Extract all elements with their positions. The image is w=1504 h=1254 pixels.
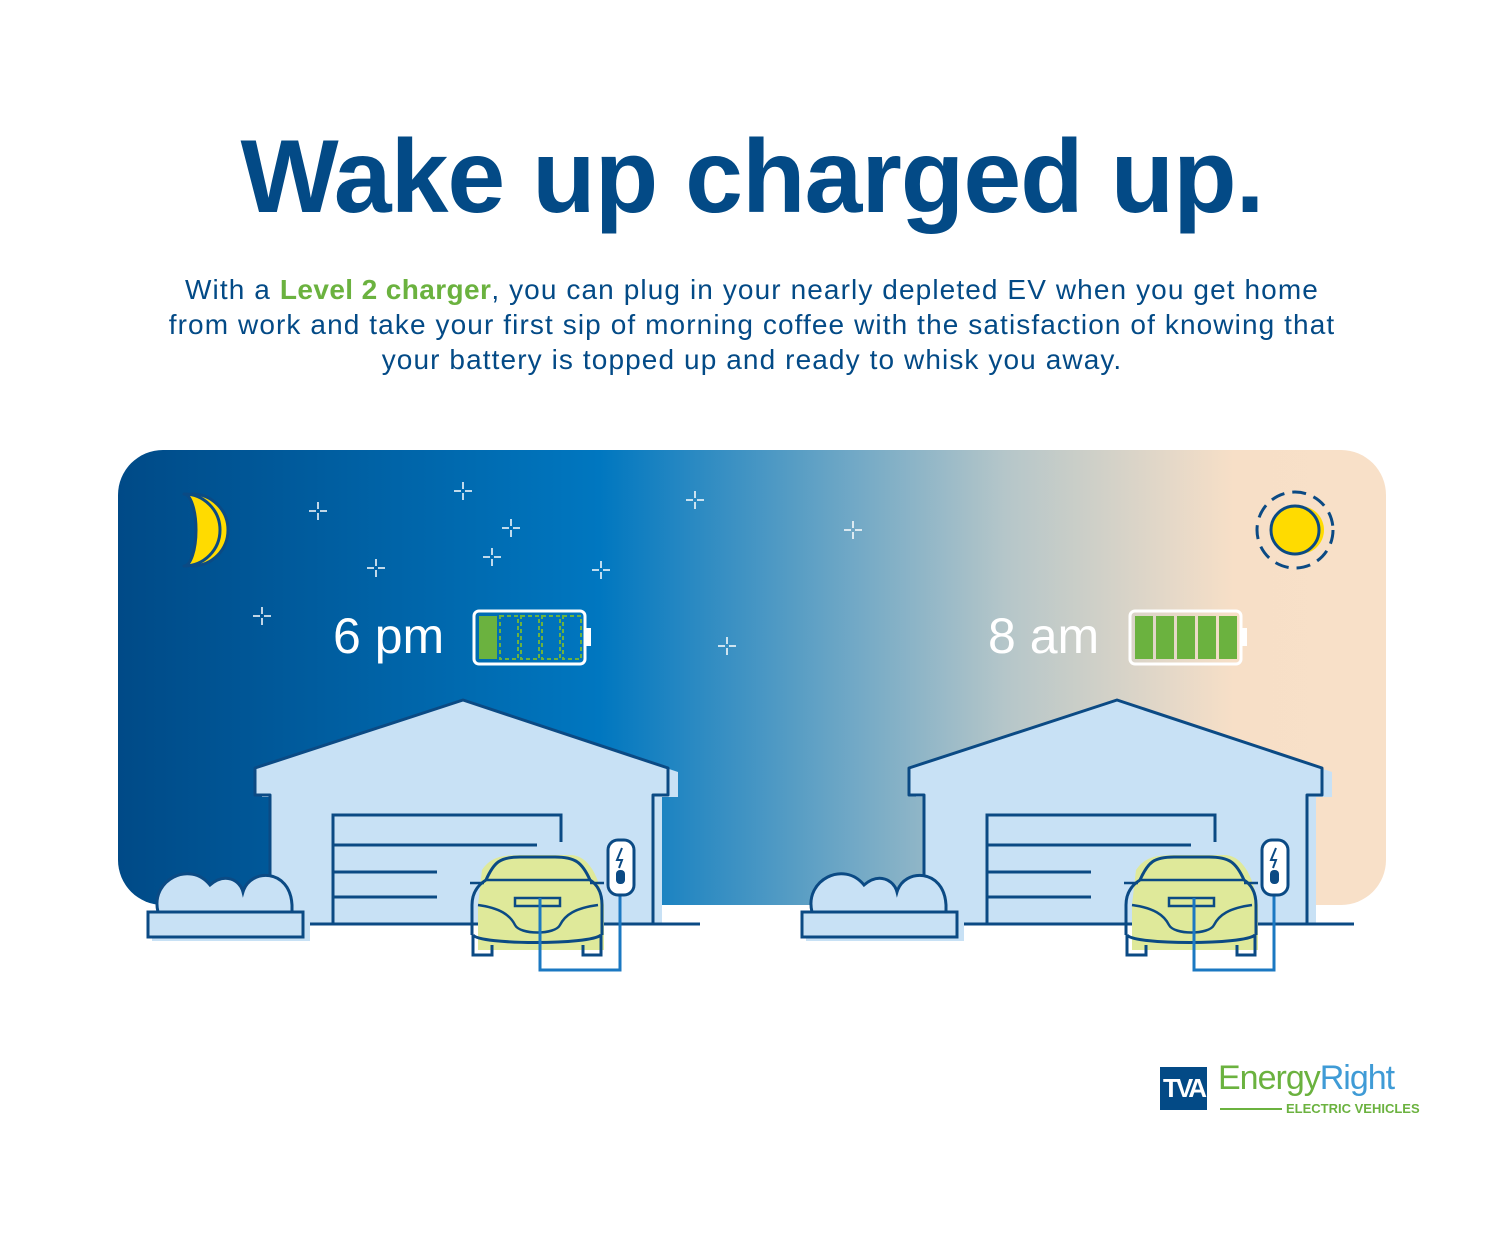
stars bbox=[253, 482, 862, 655]
intro text: from work and take your first sip of morning coffee with the satisfaction of knowing that bbox=[169, 309, 1335, 340]
icon: sun bbox=[1257, 492, 1333, 568]
intro text bbox=[169, 274, 1335, 375]
title: Wake up charged up. bbox=[240, 119, 1264, 235]
label: 6 pm: 6 pm bbox=[333, 608, 444, 664]
icon: moon bbox=[184, 494, 228, 566]
logo: ELECTRIC VEHICLES bbox=[1286, 1101, 1420, 1116]
battery: full bbox=[1130, 611, 1247, 664]
logo: TVA bbox=[1163, 1073, 1204, 1103]
logo: EnergyRight bbox=[1218, 1059, 1394, 1097]
intro text: With a Level 2 charger, you can plug in your nearly depleted EV when you get home bbox=[185, 274, 1319, 305]
battery: low bbox=[474, 611, 591, 664]
garage scene: night bbox=[148, 700, 700, 970]
label: 8 am: 8 am bbox=[988, 608, 1099, 664]
intro text: your battery is topped up and ready to whisk you away. bbox=[382, 344, 1122, 375]
garage scene: morning bbox=[802, 700, 1354, 970]
sky panel bbox=[118, 450, 1386, 905]
logo bbox=[1160, 1059, 1420, 1116]
